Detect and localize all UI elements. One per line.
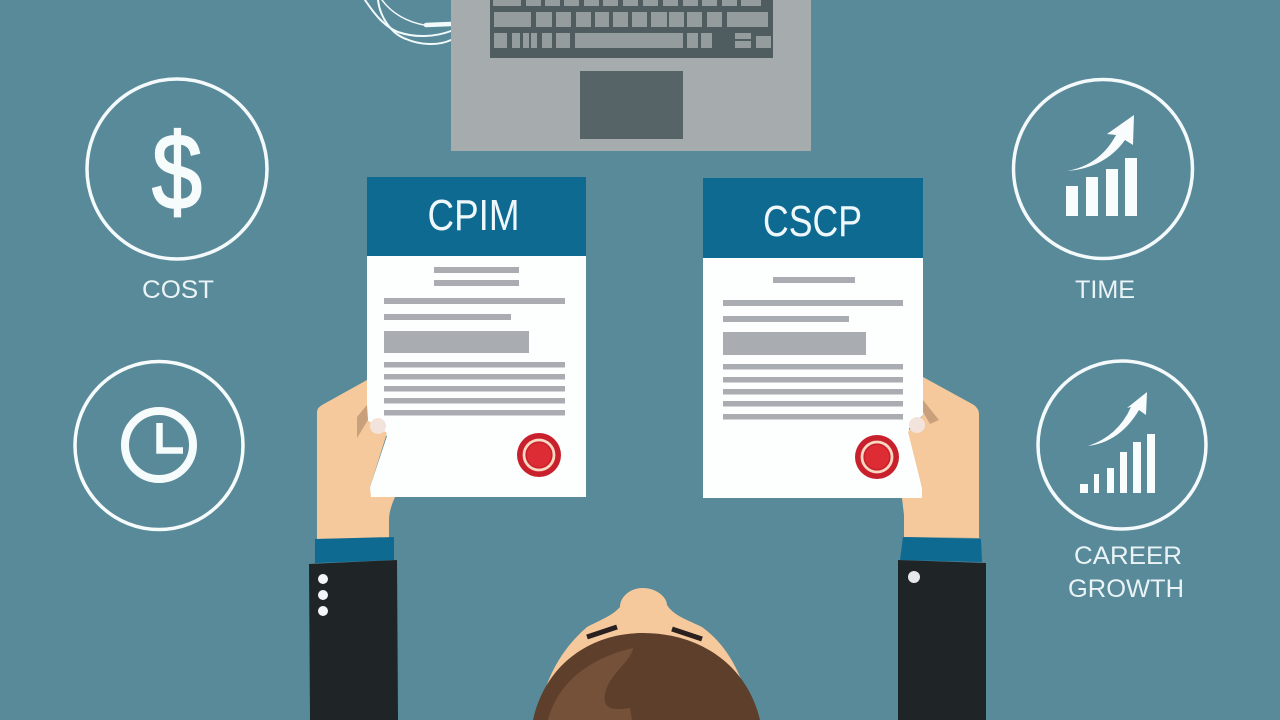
left arm and hand	[309, 380, 398, 720]
right arm and hand	[898, 377, 986, 720]
header band	[367, 177, 586, 256]
certificate title: CSCP	[763, 197, 862, 246]
hair highlight	[548, 648, 633, 720]
touchpad	[580, 71, 683, 139]
shirt cuff	[315, 537, 394, 563]
jacket sleeve	[898, 560, 986, 720]
red seal	[855, 435, 899, 479]
finger shadow	[357, 405, 368, 438]
thumbnail	[909, 417, 925, 433]
paper	[703, 258, 923, 498]
hair	[533, 633, 760, 720]
hand	[317, 380, 395, 539]
header band	[703, 178, 923, 258]
time icon: rising bar chart with arrow	[1014, 80, 1192, 258]
label: career growth: GROWTH	[1068, 575, 1184, 603]
cost icon: circle with dollar sign: $	[152, 111, 202, 232]
paper	[367, 256, 586, 497]
right certificate: CSCP	[703, 178, 923, 498]
label: time: TIME	[1075, 276, 1135, 304]
clock icon	[75, 362, 243, 530]
laptop body	[451, 0, 811, 151]
label: career growth	[1068, 542, 1184, 603]
laptop	[365, 0, 811, 151]
sleeve buttons	[318, 574, 328, 616]
document text lines	[723, 277, 903, 420]
sleeve button	[908, 571, 920, 583]
finger shadow	[923, 400, 939, 424]
shirt cuff	[900, 537, 982, 562]
left certificate: CPIM	[367, 177, 586, 497]
label: career growth: CAREER	[1074, 542, 1182, 570]
thumbnail	[370, 418, 386, 434]
certificate title: CPIM	[428, 191, 520, 240]
cost icon: circle with dollar sign	[87, 79, 267, 259]
career growth icon: rising bar chart with arrow	[1038, 361, 1206, 529]
hand	[902, 377, 979, 538]
keyboard	[490, 0, 773, 58]
jacket sleeve	[309, 560, 398, 720]
laptop cables	[365, 0, 451, 44]
document text lines	[384, 267, 565, 416]
eyebrows	[587, 627, 702, 639]
red seal	[517, 433, 561, 477]
label: cost: COST	[142, 276, 214, 304]
person head from above	[533, 588, 760, 720]
head and nose	[545, 588, 745, 690]
